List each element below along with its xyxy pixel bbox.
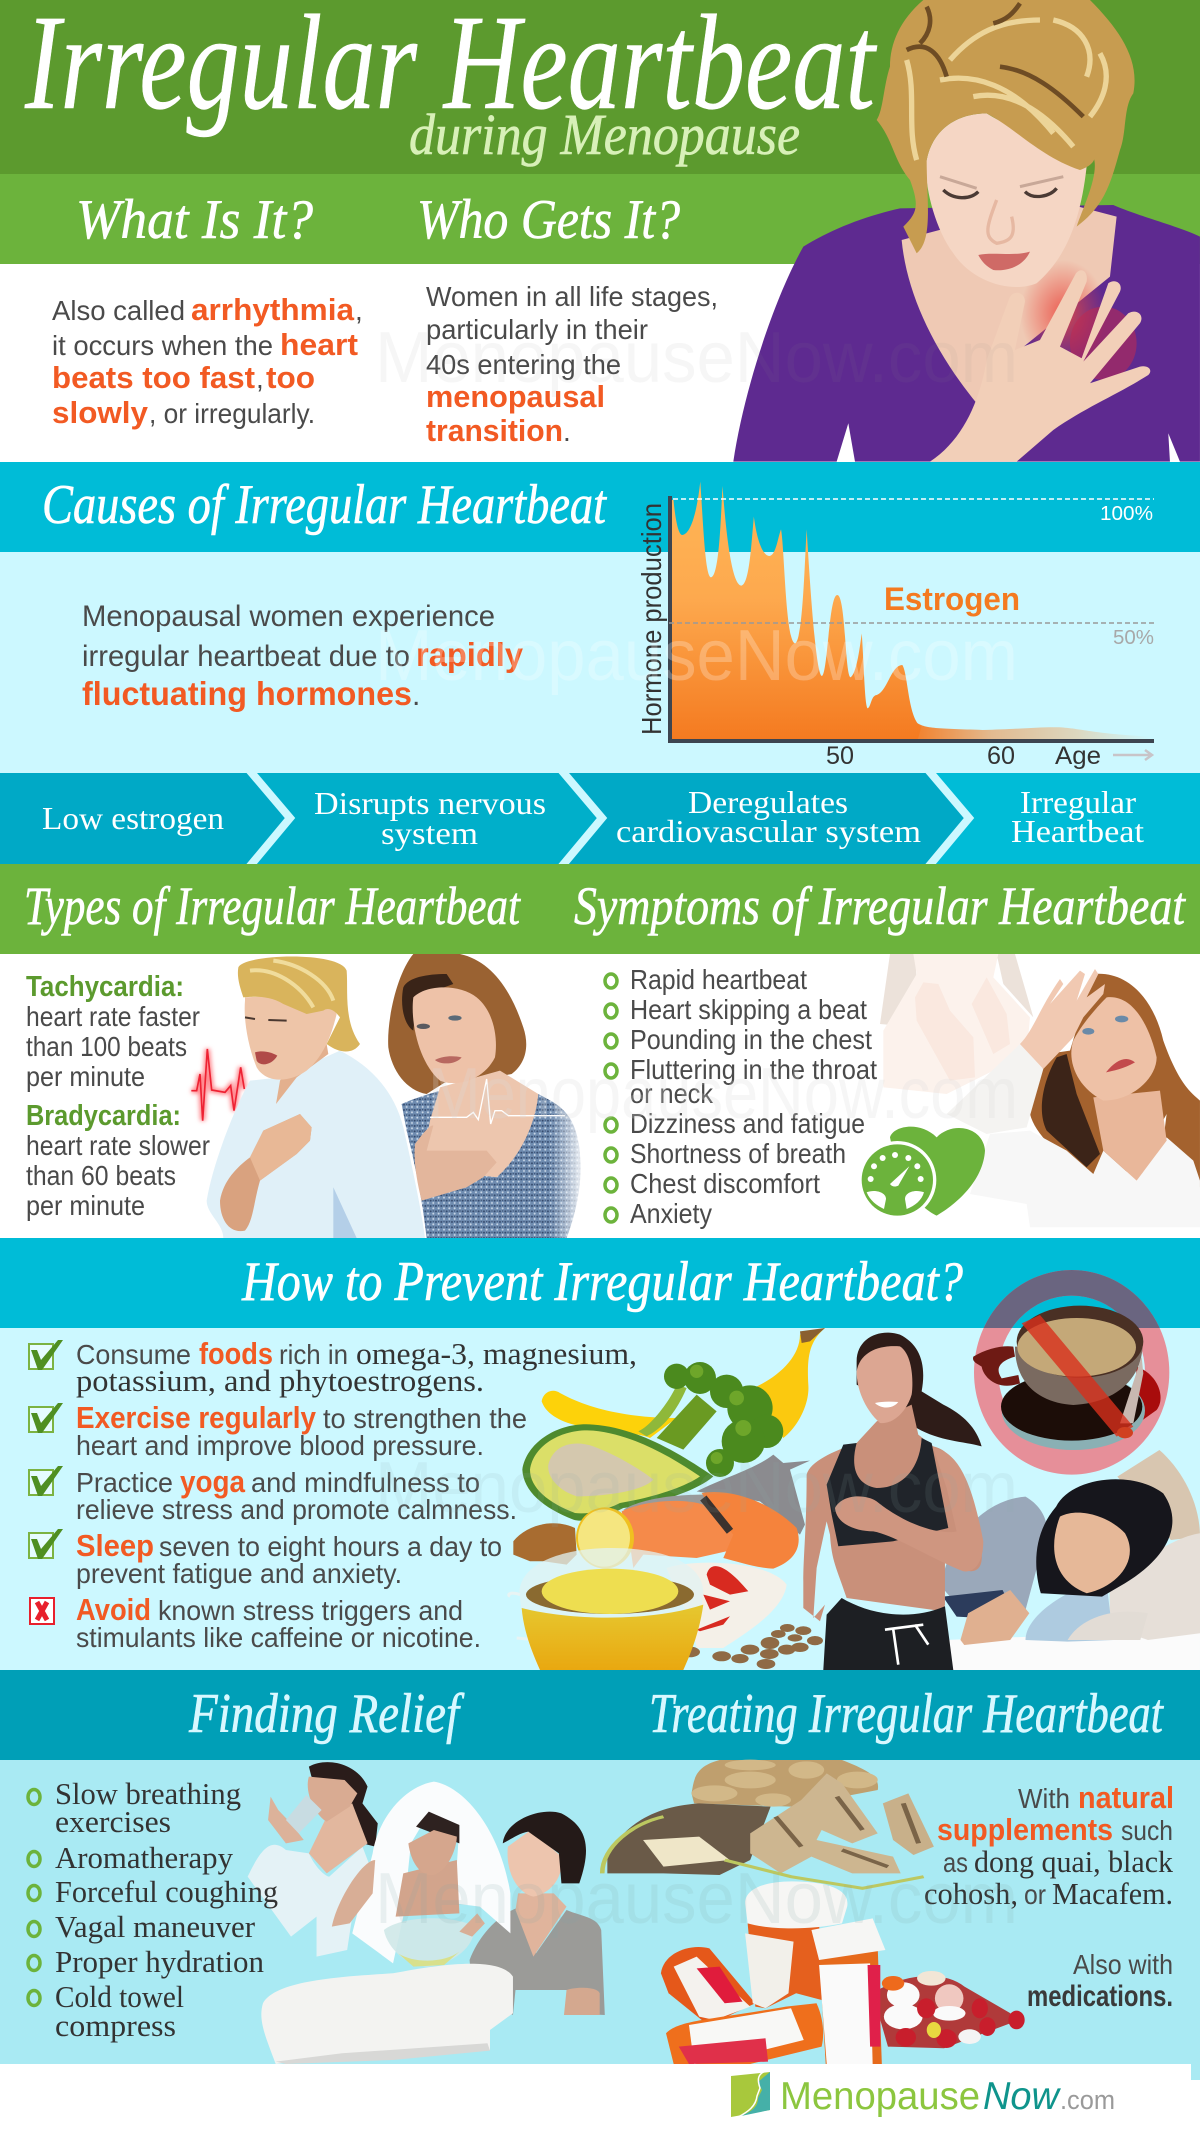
photo: healthy foods bbox=[509, 1328, 825, 1670]
text block: who gets it: menopausal bbox=[426, 379, 605, 414]
text block: what is it: arrhythmia bbox=[191, 292, 355, 327]
heading: finding relief: Finding Relief bbox=[188, 1683, 465, 1745]
chart: estrogen decline: 60 bbox=[987, 742, 1015, 770]
text block: treatments: Also with bbox=[1073, 1949, 1173, 1980]
text block: treatments: Macafem. bbox=[1052, 1876, 1173, 1911]
process flow: low estrogen to irregular heartbeat: cardiovascular system bbox=[616, 813, 921, 849]
text block: causes: irregular heartbeat due to bbox=[82, 640, 410, 673]
text block: treatments: supplements bbox=[937, 1812, 1113, 1847]
panel: what is it bbox=[52, 189, 363, 430]
chart: estrogen decline: 50% bbox=[1113, 627, 1154, 649]
text block: types: heart rate slower bbox=[26, 1130, 210, 1161]
panel: causes of irregular heartbeat bbox=[42, 474, 1154, 770]
photo: two women with chest pain bbox=[191, 954, 607, 1238]
text block: types: than 100 beats bbox=[26, 1031, 187, 1062]
photo: woman sleeping bbox=[941, 1450, 1200, 1670]
process flow: low estrogen to irregular heartbeat: Disrupts nervous bbox=[314, 785, 546, 821]
logo: menopausenow.com: .com bbox=[1060, 2085, 1115, 2115]
panel: finding relief bbox=[28, 1683, 605, 2064]
heading: prevent: How to Prevent Irregular Heartbeat? bbox=[241, 1251, 963, 1313]
list: prevention tips: omega-3, magnesium, bbox=[356, 1336, 637, 1371]
process flow: low estrogen to irregular heartbeat: Irregular bbox=[1020, 784, 1136, 820]
list: prevention tips: foods bbox=[199, 1336, 273, 1371]
text block: who gets it: 40s entering the bbox=[426, 349, 621, 380]
text block: causes: fluctuating hormones bbox=[82, 675, 412, 712]
text block: types bbox=[26, 971, 210, 1221]
panel: symptoms of irregular heartbeat bbox=[574, 876, 1200, 1229]
text block: what is it: , bbox=[256, 363, 264, 394]
watermarks: MenopauseNow.com bbox=[375, 1448, 1018, 1528]
text block: types: than 60 beats bbox=[26, 1160, 176, 1191]
text block: treatments bbox=[924, 1780, 1174, 2013]
icon: no coffee bbox=[973, 1270, 1169, 1475]
text block: causes: Menopausal women experience bbox=[82, 600, 495, 633]
chart: estrogen decline: 100% bbox=[1100, 503, 1153, 525]
list: relief methods: Aromatherapy bbox=[55, 1840, 233, 1875]
process flow: low estrogen to irregular heartbeat: Low estrogen bbox=[42, 800, 224, 836]
process flow: low estrogen to irregular heartbeat bbox=[0, 773, 1200, 864]
list: prevention tips bbox=[29, 1336, 637, 1653]
icon: leaf profile bbox=[731, 2071, 770, 2117]
list: prevention tips: relieve stress and promote calmness. bbox=[76, 1494, 517, 1525]
list: prevention tips: and mindfulness to bbox=[251, 1467, 480, 1498]
chart: estrogen decline: Hormone production bbox=[636, 503, 667, 735]
arrow: age axis bbox=[1113, 750, 1152, 760]
text block: types: heart rate faster bbox=[26, 1001, 200, 1032]
panel: how to prevent irregular heartbeat bbox=[29, 1251, 1200, 1670]
process flow: low estrogen to irregular heartbeat: system bbox=[381, 815, 478, 851]
list: prevention tips: heart and improve blood pressure. bbox=[76, 1430, 484, 1461]
text block: what is it: , bbox=[355, 295, 363, 326]
text block: what is it: Also called bbox=[52, 295, 185, 326]
list: relief methods: Proper hydration bbox=[55, 1944, 264, 1979]
list: symptoms: or neck bbox=[630, 1078, 714, 1109]
list: symptoms: Heart skipping a beat bbox=[630, 994, 867, 1025]
panel: types of irregular heartbeat bbox=[24, 876, 607, 1238]
chart: estrogen decline: Estrogen bbox=[884, 581, 1020, 617]
photo: woman running bbox=[803, 1333, 983, 1670]
process flow: low estrogen to irregular heartbeat: Heartbeat bbox=[1011, 813, 1144, 849]
text block: treatments: natural bbox=[1078, 1780, 1174, 1815]
text block: who gets it: . bbox=[563, 416, 571, 447]
list: symptoms bbox=[605, 964, 877, 1229]
text block: treatments: With bbox=[1018, 1783, 1070, 1814]
logo: menopausenow.com: Now bbox=[983, 2075, 1062, 2118]
text block: treatments: as bbox=[943, 1847, 968, 1878]
photo: woman holding chest bbox=[733, 0, 1200, 462]
list: prevention tips: to strengthen the bbox=[323, 1403, 527, 1434]
logo: menopausenow.com: Menopause bbox=[780, 2075, 980, 2118]
text block: causes: rapidly bbox=[416, 636, 524, 673]
list: prevention tips: seven to eight hours a day to bbox=[159, 1531, 502, 1562]
list: symptoms: Rapid heartbeat bbox=[630, 964, 807, 995]
icon: check marks bbox=[29, 1340, 63, 1559]
list: prevention tips: Sleep bbox=[76, 1528, 154, 1563]
panel: treating irregular heartbeat bbox=[602, 1683, 1174, 2064]
watermarks: MenopauseNow.com bbox=[375, 318, 1018, 398]
list: prevention tips: yoga bbox=[180, 1464, 246, 1499]
list: symptoms: Dizziness and fatigue bbox=[630, 1108, 865, 1139]
watermarks: MenopauseNow.com bbox=[428, 1054, 1018, 1134]
list: prevention tips: stimulants like caffeine or nicotine. bbox=[76, 1622, 481, 1653]
heading: what is it: What Is It? bbox=[76, 189, 313, 251]
text block: causes bbox=[82, 600, 524, 712]
text block: what is it: too bbox=[266, 360, 315, 395]
list: prevention tips: rich in bbox=[279, 1339, 348, 1370]
list: prevention tips: Consume bbox=[76, 1339, 191, 1370]
list: relief methods: Forceful coughing bbox=[55, 1874, 278, 1909]
text block: what is it: it occurs when the bbox=[52, 330, 273, 361]
text block: treatments: or bbox=[1024, 1879, 1046, 1910]
photo: woman with dizziness bbox=[880, 954, 1200, 1227]
list: prevention tips: prevent fatigue and anxiety. bbox=[76, 1558, 402, 1589]
process flow: low estrogen to irregular heartbeat: Deregulates bbox=[688, 784, 848, 820]
text block: what is it: beats too fast bbox=[52, 360, 255, 395]
logo: menopausenow.com bbox=[731, 2071, 1115, 2118]
photo: natural supplements bbox=[602, 1760, 934, 1888]
photo: medication bottles and pills bbox=[661, 1881, 1025, 2064]
text block: treatments: cohosh, bbox=[924, 1876, 1018, 1911]
text block: treatments: such bbox=[1121, 1815, 1173, 1846]
list: relief methods: Cold towel bbox=[55, 1979, 184, 2014]
list: prevention tips: Practice bbox=[76, 1467, 173, 1498]
list: symptoms: Fluttering in the throat bbox=[630, 1054, 877, 1085]
text block: treatments: dong quai, black bbox=[974, 1844, 1173, 1879]
title bbox=[24, 0, 878, 167]
chart: estrogen decline: 50 bbox=[826, 742, 854, 770]
text block: types: per minute bbox=[26, 1061, 145, 1092]
title: during Menopause bbox=[409, 102, 800, 167]
list: relief methods bbox=[28, 1776, 278, 2043]
text block: who gets it: Women in all life stages, bbox=[426, 281, 718, 312]
watermarks bbox=[375, 318, 1018, 1939]
watermarks: MenopauseNow.com bbox=[375, 616, 1018, 696]
list: prevention tips: potassium, and phytoestrogens. bbox=[76, 1363, 484, 1398]
watermarks: MenopauseNow.com bbox=[375, 1859, 1018, 1939]
list: symptoms: Anxiety bbox=[630, 1198, 712, 1229]
list: relief methods: exercises bbox=[55, 1804, 171, 1839]
text block: what is it: heart bbox=[280, 327, 358, 362]
list: relief methods: compress bbox=[55, 2008, 176, 2043]
text block: who gets it: particularly in their bbox=[426, 314, 648, 345]
text block: what is it bbox=[52, 292, 363, 430]
panel: who gets it bbox=[417, 189, 718, 448]
icon: x mark bbox=[30, 1598, 54, 1624]
list: prevention tips: Exercise regularly bbox=[76, 1400, 317, 1435]
heading: causes: Causes of Irregular Heartbeat bbox=[42, 474, 607, 536]
list: symptoms: Chest discomfort bbox=[630, 1168, 820, 1199]
chart: estrogen decline bbox=[636, 482, 1154, 770]
text block: who gets it: transition bbox=[426, 413, 563, 448]
text block: types: per minute bbox=[26, 1190, 145, 1221]
photo: women using relief methods bbox=[248, 1762, 605, 2064]
list: relief methods: Vagal maneuver bbox=[55, 1909, 256, 1944]
list: prevention tips: known stress triggers and bbox=[158, 1595, 463, 1626]
list: symptoms: Pounding in the chest bbox=[630, 1024, 872, 1055]
list: prevention tips: Avoid bbox=[76, 1592, 151, 1627]
heading: types: Types of Irregular Heartbeat bbox=[24, 876, 522, 936]
text block: what is it: , or irregularly. bbox=[149, 398, 315, 429]
text block: types: Tachycardia: bbox=[26, 971, 184, 1003]
icon: heart with gauge bbox=[858, 1127, 985, 1219]
text block: types: Bradycardia: bbox=[26, 1100, 181, 1132]
chart: estrogen decline: Age bbox=[1055, 742, 1101, 770]
text block: causes: . bbox=[412, 679, 420, 712]
list: symptoms: Shortness of breath bbox=[630, 1138, 846, 1169]
text block: what is it: slowly bbox=[52, 395, 149, 430]
list: relief methods: Slow breathing bbox=[55, 1776, 241, 1811]
text block: who gets it bbox=[426, 281, 718, 448]
heading: who gets it: Who Gets It? bbox=[417, 189, 680, 251]
